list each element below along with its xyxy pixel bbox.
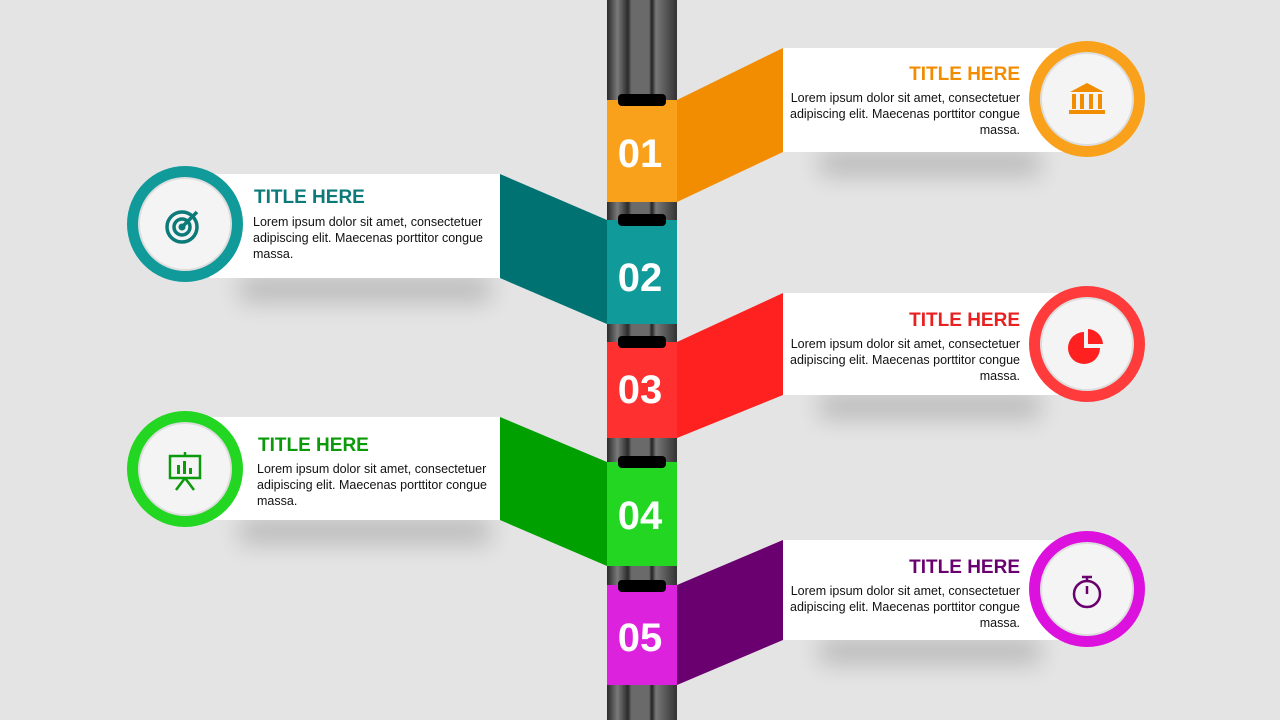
step 02: adipiscing elit. Maecenas porttitor congue: [253, 231, 483, 245]
step 05: adipiscing elit. Maecenas porttitor congue: [790, 600, 1020, 614]
step 02: [127, 166, 677, 324]
step 04: TITLE HERE: [258, 435, 369, 456]
step 03: [607, 286, 1145, 438]
step 05: [607, 531, 1145, 685]
step 04: Lorem ipsum dolor sit amet, consectetuer: [257, 462, 486, 476]
step 02: massa.: [253, 247, 293, 261]
step 04: massa.: [257, 494, 297, 508]
step 01: massa.: [980, 123, 1020, 137]
step 01: [607, 41, 1145, 202]
step 03: TITLE HERE: [909, 310, 1020, 331]
step 02: Lorem ipsum dolor sit amet, consectetuer: [253, 215, 482, 229]
step 04: [127, 411, 677, 566]
step 03: massa.: [980, 369, 1020, 383]
step 01: TITLE HERE: [909, 64, 1020, 85]
step 05: TITLE HERE: [909, 557, 1020, 578]
step 03: adipiscing elit. Maecenas porttitor congue: [790, 353, 1020, 367]
step 02: 02: [618, 256, 662, 300]
pole: [607, 0, 677, 720]
step 01: adipiscing elit. Maecenas porttitor congue: [790, 107, 1020, 121]
step 01: 01: [618, 132, 662, 176]
step 05: Lorem ipsum dolor sit amet, consectetuer: [791, 584, 1020, 598]
step 03: 03: [618, 368, 662, 412]
step 04: 04: [618, 494, 663, 538]
step 02: TITLE HERE: [254, 187, 365, 208]
step 03: Lorem ipsum dolor sit amet, consectetuer: [791, 337, 1020, 351]
card shadows: [240, 150, 1040, 664]
step 04: adipiscing elit. Maecenas porttitor congue: [257, 478, 487, 492]
step 01: Lorem ipsum dolor sit amet, consectetuer: [791, 91, 1020, 105]
step 05: 05: [618, 616, 662, 660]
step 05: massa.: [980, 616, 1020, 630]
